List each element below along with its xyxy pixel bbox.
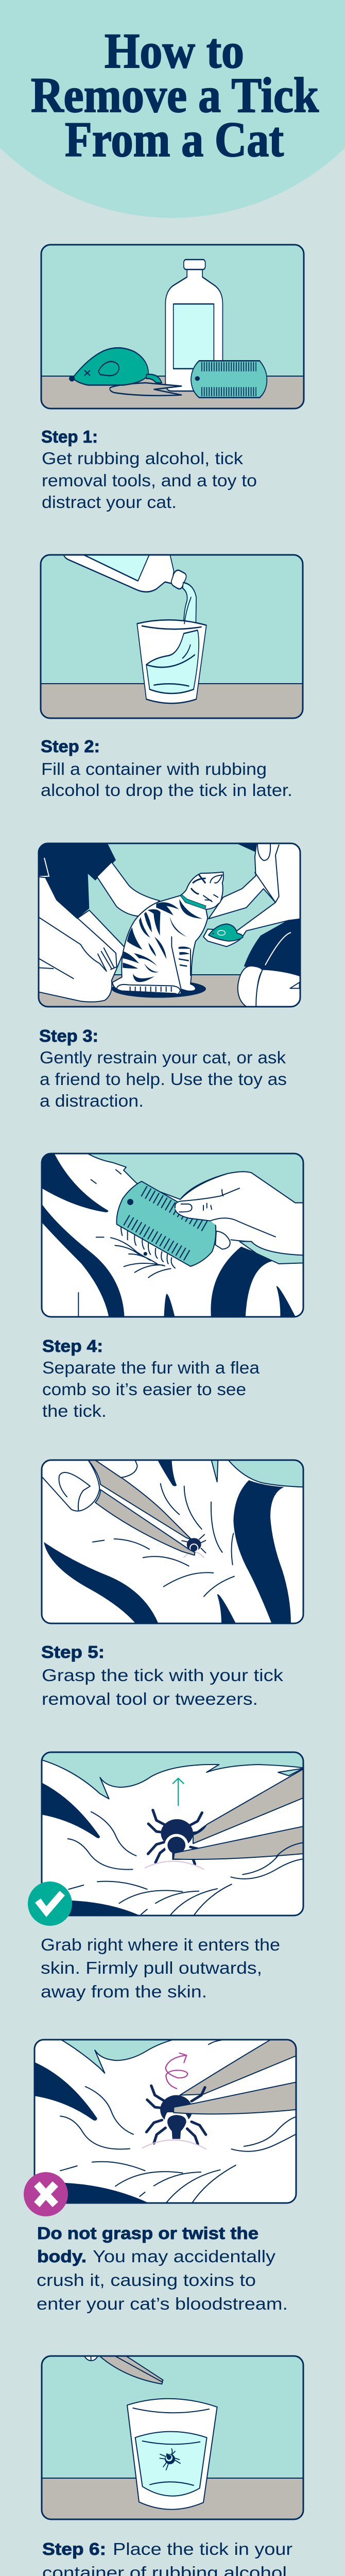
incorrect grip text <box>37 2224 288 2313</box>
icon: alcohol stream <box>183 583 196 625</box>
fur lines and tick <box>78 1170 175 1317</box>
icon: glass <box>127 2399 217 2510</box>
panel: step 3 restraining cat <box>38 843 301 1007</box>
step 3 text: Gently restrain your cat, or ask <box>40 1048 286 1067</box>
step 6 text: Place the tick in your <box>113 2539 292 2558</box>
icon: tweezers <box>180 2039 300 2095</box>
hand back <box>215 1231 230 1249</box>
step 4 text: Step 4: <box>42 1336 103 1355</box>
cat fur <box>31 2039 300 2205</box>
icon: flea comb <box>191 361 267 398</box>
step 5 text: removal tool or tweezers. <box>42 1689 258 1708</box>
step 6 text: Step 6: <box>42 2539 106 2558</box>
step 4 text: Separate the fur with a flea <box>42 1358 260 1377</box>
title: From a Cat <box>65 112 284 167</box>
step 1 text <box>41 427 257 512</box>
header arc <box>0 0 345 218</box>
icon: tweezers <box>88 1459 192 1539</box>
correct grip text: Grab right where it enters the <box>41 1935 280 1954</box>
icon: tweezers <box>84 2355 163 2384</box>
panel: step 2 filling glass <box>41 554 303 718</box>
panel: step 1 supplies <box>41 245 304 409</box>
fingers <box>40 1459 137 1511</box>
step 2 text <box>41 737 292 800</box>
panel: correct grip <box>28 1752 305 1926</box>
icon: glass with alcohol <box>137 597 206 703</box>
title: Remove a Tick <box>31 67 319 123</box>
icon: tweezers lower arm <box>174 2081 300 2114</box>
icon: tick in alcohol <box>160 2449 180 2470</box>
panel: step 4 flea comb <box>40 1153 304 1318</box>
helper on the left <box>38 843 160 1002</box>
hand <box>175 1172 304 1255</box>
correct grip text: away from the skin. <box>41 1982 207 2001</box>
incorrect grip text: enter your cat’s bloodstream. <box>37 2294 288 2313</box>
step 2 text: Step 2: <box>41 737 100 756</box>
icon: cat shadow <box>112 982 206 998</box>
fur stripes <box>44 1459 291 1624</box>
icon: tick <box>181 1534 206 1558</box>
icon: twist arrow <box>166 2053 187 2089</box>
step 2 text: alcohol to drop the tick in later. <box>41 781 292 800</box>
icon: toy mouse <box>69 348 162 385</box>
step 5 text: Step 5: <box>41 1642 105 1662</box>
icon: tilted bottle <box>64 554 186 592</box>
step 4 text <box>42 1336 260 1420</box>
icon: upward arrow <box>173 1778 184 1805</box>
icon: tick <box>142 2086 206 2149</box>
icon: rubbing alcohol bottle <box>165 260 222 391</box>
step 4 text: comb so it’s easier to see <box>42 1380 246 1399</box>
step 1 text: Get rubbing alcohol, tick <box>42 449 244 468</box>
icon: green check badge <box>28 1882 72 1926</box>
step 3 text: Step 3: <box>39 1026 98 1045</box>
step 4 text: the tick. <box>42 1401 107 1420</box>
icon: magenta x badge <box>24 2172 68 2216</box>
step 1 text: Step 1: <box>41 427 98 446</box>
cat <box>112 872 223 995</box>
icon: flea comb <box>116 1181 216 1266</box>
fur stripes <box>40 1153 296 1318</box>
step 6 text <box>42 2539 292 2576</box>
panel: step 5 grasping tick <box>40 1459 304 1624</box>
fur lines <box>68 1812 303 1916</box>
icon: tick <box>145 1810 205 1869</box>
step 5 text <box>41 1642 284 1708</box>
fur lines <box>93 1484 234 1597</box>
incorrect grip text: Do not grasp or twist the <box>37 2224 258 2243</box>
step 3 text <box>39 1026 287 1110</box>
incorrect grip text: crush it, causing toxins to <box>37 2270 256 2290</box>
title <box>31 23 319 167</box>
step 1 text: distract your cat. <box>42 493 177 512</box>
panel: incorrect grip <box>24 2039 300 2216</box>
incorrect grip text: body. <box>37 2247 87 2266</box>
fur stripes <box>40 1782 142 1917</box>
incorrect grip text: You may accidentally <box>93 2247 276 2266</box>
icon: tweezers <box>193 1768 305 1843</box>
icon: toy mouse in hand <box>209 924 243 941</box>
step 1 text: removal tools, and a toy to <box>42 471 257 490</box>
correct grip text: skin. Firmly pull outwards, <box>41 1958 262 1977</box>
background sky <box>228 1459 304 1487</box>
step 3 text: a friend to help. Use the toy as <box>40 1070 287 1089</box>
step 5 text: Grasp the tick with your tick <box>42 1666 284 1685</box>
fur lines <box>60 2087 295 2202</box>
step 3 text: a distraction. <box>40 1091 144 1110</box>
cat fur <box>40 1759 305 1918</box>
icon: sleeve <box>239 1242 304 1264</box>
step 2 text: Fill a container with rubbing <box>41 759 267 778</box>
correct grip text <box>41 1935 280 2001</box>
helper on the right <box>203 843 301 1007</box>
panel: step 6 tick in glass <box>42 2355 303 2519</box>
title: How to <box>105 23 244 78</box>
fur stripes <box>31 2061 151 2204</box>
background sky <box>87 1153 304 1203</box>
icon: tweezers <box>110 383 182 396</box>
